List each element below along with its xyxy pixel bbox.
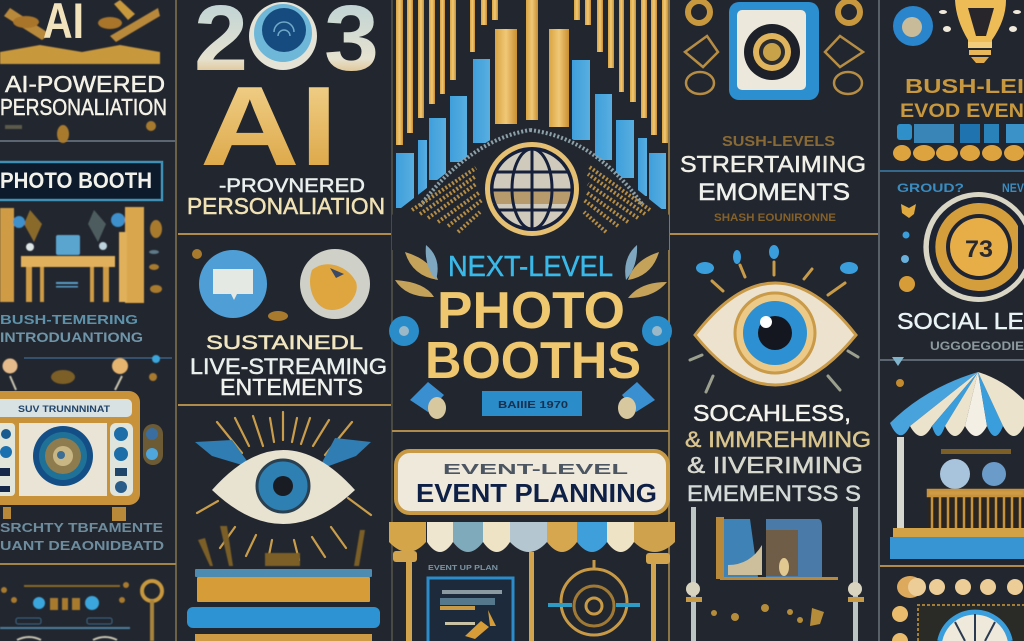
dark dome behind globe bbox=[392, 128, 669, 250]
sparks bbox=[939, 10, 1021, 32]
TV right controls bbox=[110, 423, 133, 496]
iris bbox=[735, 293, 815, 373]
text: streaming: STRERTAIMING bbox=[680, 151, 866, 177]
text: gold small: SHASH EOUNIRONNE bbox=[714, 212, 836, 224]
sign small text: EVENT-LEVEL bbox=[443, 461, 628, 478]
leaves right bbox=[625, 245, 667, 298]
TV feet bbox=[3, 507, 126, 521]
icon: chat bubble bbox=[199, 250, 267, 318]
panel: 2023 AI bbox=[187, 0, 385, 219]
tent canopy bbox=[890, 372, 1024, 436]
icon: light bulb bbox=[955, 0, 1006, 63]
panel: bottom-left controls bbox=[0, 581, 162, 641]
icon: diamonds bbox=[685, 36, 863, 94]
sign board bbox=[396, 451, 668, 513]
gold dots bbox=[893, 145, 1024, 161]
target dial bbox=[548, 560, 640, 635]
leaves left bbox=[395, 245, 438, 297]
blue wings bbox=[195, 438, 371, 470]
panel: photo booth bbox=[0, 162, 162, 345]
small caption: EVENT UP PLAN bbox=[428, 565, 498, 572]
text: live-streaming: LIVE-STREAMING bbox=[190, 354, 387, 379]
panel: camera and streaming bbox=[680, 1, 866, 224]
text: personalisation: PERSONALIATION bbox=[187, 193, 385, 219]
gold lower plinth bbox=[195, 634, 372, 641]
TV side dials bbox=[143, 424, 163, 465]
gold plinth bbox=[197, 577, 370, 602]
camera lens bbox=[744, 24, 800, 80]
camera face bbox=[737, 10, 806, 90]
text: gold heading second line: EVOD EVEN bbox=[900, 101, 1024, 122]
panel: event planning bbox=[389, 451, 675, 641]
antenna knobs bbox=[2, 355, 160, 390]
caption text: BUSH-TEMERING bbox=[0, 312, 138, 327]
rays bbox=[197, 412, 371, 560]
gold platform bbox=[893, 528, 1024, 539]
TV top bar bbox=[0, 399, 132, 417]
blue base bbox=[890, 537, 1024, 559]
panel: centre title bbox=[389, 0, 672, 419]
text: social: SOCAHLESS, bbox=[693, 400, 851, 426]
text: immersive: & IMMREHMING bbox=[685, 427, 871, 452]
blue caption left: GROUD? bbox=[897, 181, 964, 195]
dotted frame edge bbox=[918, 605, 1024, 641]
text: entements: ENTEMENTS bbox=[220, 374, 363, 400]
panel: live-streaming bbox=[190, 249, 387, 400]
photo booth sign bbox=[0, 162, 162, 200]
icon: gold rings top bbox=[688, 1, 860, 23]
TV lens bbox=[33, 426, 93, 486]
icon: thumb left bbox=[410, 382, 446, 419]
heading: AI-powered: AI-POWERED bbox=[5, 71, 165, 97]
rays bbox=[690, 262, 858, 392]
text: social: SOCIAL LE bbox=[897, 308, 1024, 334]
text: sustained: SUSTAINEDL bbox=[206, 333, 363, 354]
tent pole bbox=[897, 437, 904, 529]
TV frame bbox=[0, 391, 140, 505]
text: small caption: UGGOEGODIE bbox=[930, 339, 1024, 353]
marker gems bbox=[892, 357, 904, 387]
caption text second line: UANT DEAONIDBATD bbox=[0, 538, 164, 553]
text: gold small: SUSH-LEVELS bbox=[722, 133, 835, 150]
icon: globe bbox=[940, 612, 1010, 641]
sign heading: EVENT PLANNING bbox=[416, 478, 657, 508]
TV left controls bbox=[0, 423, 15, 496]
booth table and curtains bbox=[0, 207, 162, 303]
blue plinth bbox=[187, 607, 380, 628]
year: 0 swirl bbox=[249, 2, 317, 70]
decorative gold specks bbox=[192, 249, 288, 321]
title: photo: PHOTO bbox=[437, 282, 625, 340]
panel: lightbulb bbox=[893, 0, 1024, 161]
icon: blue disc right bbox=[642, 316, 672, 346]
eye white bbox=[212, 450, 355, 524]
text: live: & IIVERIMING bbox=[687, 452, 863, 478]
wooden fence bbox=[928, 490, 1024, 528]
title: booths: BOOTHS bbox=[425, 332, 641, 390]
icon: globe bbox=[485, 142, 579, 236]
icon: blue disc left bbox=[389, 316, 419, 346]
ornament below eye bbox=[198, 526, 365, 566]
icon: blue disc bbox=[893, 6, 933, 46]
text: enrichments: EMEMENTSS S bbox=[687, 481, 861, 506]
panel: bottom-right lights bbox=[892, 576, 1024, 641]
text: gold heading: BUSH-LEI bbox=[905, 76, 1024, 98]
pillars bbox=[686, 507, 864, 641]
schedule board bbox=[428, 578, 513, 641]
heading: AI: AI bbox=[200, 63, 338, 189]
icon: badge: 73 bbox=[965, 236, 993, 263]
panel: social badge bbox=[897, 181, 1024, 353]
awning bbox=[389, 522, 675, 552]
panel: AI-powered personalisation (left) bbox=[0, 0, 167, 143]
panel: eye with plinths bbox=[187, 412, 380, 641]
panel: market tent bbox=[890, 357, 1024, 559]
awning posts bbox=[393, 551, 670, 641]
date button text: BAIIIE 1970 bbox=[498, 400, 569, 411]
icon: badge bbox=[923, 192, 1024, 302]
small gold dots row bbox=[5, 121, 156, 143]
panel: retro TV bbox=[0, 355, 172, 553]
TV top bar text: SUV TRUNNNINAT bbox=[18, 404, 111, 414]
caption text: SRCHTY TBFAMENTE bbox=[0, 520, 163, 535]
gold ornament crest bbox=[0, 0, 160, 64]
title: next-level: NEXT-LEVEL bbox=[448, 251, 613, 283]
ray tips bbox=[696, 245, 858, 274]
gold organ bars bbox=[396, 0, 668, 145]
iris bbox=[257, 460, 309, 512]
date button bbox=[482, 391, 582, 416]
dotted frame bbox=[918, 605, 1024, 641]
icon: smiling face bbox=[300, 249, 370, 319]
dotted arch bbox=[412, 130, 650, 232]
icon: thumb right bbox=[618, 382, 655, 419]
antenna wire bbox=[24, 357, 172, 359]
heading: personalisation: PERSONALIATION bbox=[0, 94, 167, 120]
side icons bbox=[899, 204, 916, 292]
text: powered: -PROVNERED bbox=[219, 176, 365, 197]
exhibit frame bbox=[716, 517, 838, 580]
text: enrichments: EMOMENTS bbox=[698, 179, 850, 206]
caption text second line: INTRODUANTIONG bbox=[0, 329, 143, 345]
sign border bbox=[0, 162, 162, 200]
light bulbs bbox=[892, 576, 1023, 641]
label: photo booth: PHOTO BOOTH bbox=[0, 168, 152, 193]
blue organ bars bbox=[396, 59, 666, 209]
tent contents bbox=[940, 449, 1011, 489]
eye white bbox=[695, 283, 856, 385]
panel: big eye bbox=[685, 245, 871, 641]
camera body bbox=[729, 2, 819, 100]
blue tiles bbox=[897, 124, 1024, 143]
blue top bar bbox=[195, 569, 372, 577]
gold flecks bbox=[711, 604, 824, 626]
TV screen bbox=[19, 423, 107, 496]
